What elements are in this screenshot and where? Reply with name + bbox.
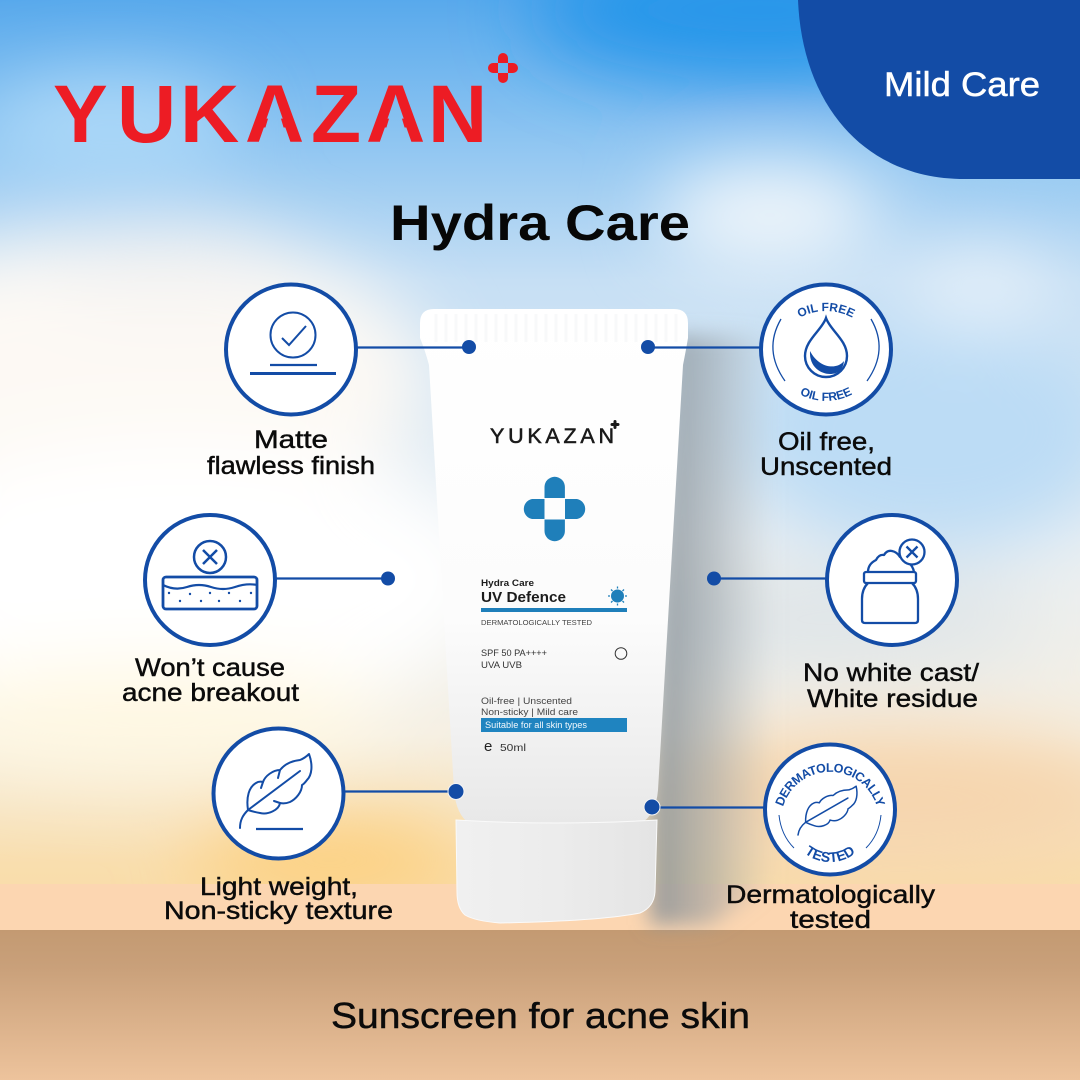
feature: matte finish: flawless finish (207, 452, 375, 480)
tube label text: Hydra Care (481, 578, 534, 589)
tube label text: Oil-free | Unscented (481, 696, 572, 706)
connector (648, 346, 761, 349)
tube plus mark (610, 420, 620, 429)
tube cross emblem (524, 477, 585, 541)
feature: oil free: Unscented (760, 453, 892, 481)
tube recycle mark (615, 648, 627, 659)
logo plus mark (488, 53, 518, 83)
icon: oil free drop: OIL FREE (798, 302, 856, 318)
tube label text: Suitable for all skin types (485, 720, 587, 730)
tube cap (456, 820, 657, 923)
feature: no white cast: White residue (807, 685, 978, 713)
feature: oil free (641, 282, 893, 481)
feature: no white cast (707, 515, 979, 713)
label: Dermatologically (726, 881, 936, 909)
tube label text: SPF 50 PA++++ (481, 648, 547, 659)
feature: no acne breakout (122, 515, 395, 707)
tube sun icon (608, 586, 627, 606)
icon: oil free drop: OIL FREE (801, 387, 852, 401)
tube label text: e (484, 738, 492, 755)
connector (714, 577, 827, 580)
icon: dermatologically tested badge (763, 742, 897, 876)
brand logo (54, 53, 518, 143)
connector (343, 790, 456, 793)
feature: light weight: Non-sticky texture (164, 897, 393, 925)
connector (356, 346, 469, 349)
connector (275, 577, 388, 580)
tube label text: DERMATOLOGICALLY TESTED (481, 618, 593, 627)
feature: no acne breakout: acne breakout (122, 679, 299, 707)
icon: check on surface (226, 284, 356, 414)
label: Won’t cause (135, 654, 285, 682)
tube label text: 50ml (500, 742, 526, 754)
label: No white cast/ (803, 659, 979, 687)
connector (652, 806, 765, 809)
label: Matte (254, 426, 328, 454)
tube label text: Non-sticky | Mild care (481, 707, 578, 717)
tube label text: UVA UVB (481, 660, 522, 671)
icon: feather (214, 728, 344, 858)
feature: dermatologically tested (644, 742, 936, 934)
tube label text: UV Defence (481, 589, 566, 606)
icon: skin layer with cross (145, 515, 275, 645)
tube crimp ribs (436, 314, 676, 342)
title: Hydra Care (390, 195, 690, 251)
corner badge: Mild Care (884, 66, 1040, 104)
icon: dermatologically tested badge: TESTED (807, 845, 854, 862)
feature: dermatologically tested: tested (790, 906, 871, 934)
icon: dermatologically tested badge: DERMATOLOGICALLY (775, 763, 886, 806)
tube shadow (650, 335, 775, 925)
table front (0, 930, 1080, 1080)
label: Light weight, (200, 873, 358, 901)
product tube (420, 309, 688, 923)
corner badge (798, 0, 1080, 179)
icon: oil free drop (759, 282, 893, 416)
icon: jar with cross (827, 515, 957, 645)
table top (0, 884, 1080, 931)
feature: matte finish (207, 284, 476, 480)
brand logo: YUKAZAN (53, 69, 487, 160)
tube body (420, 309, 688, 824)
tagline: Sunscreen for acne skin (331, 995, 750, 1036)
tube logo: YUKAZAN (490, 424, 614, 448)
label: Oil free, (778, 428, 875, 456)
tube label text (481, 578, 627, 755)
feature: light weight (164, 728, 464, 925)
